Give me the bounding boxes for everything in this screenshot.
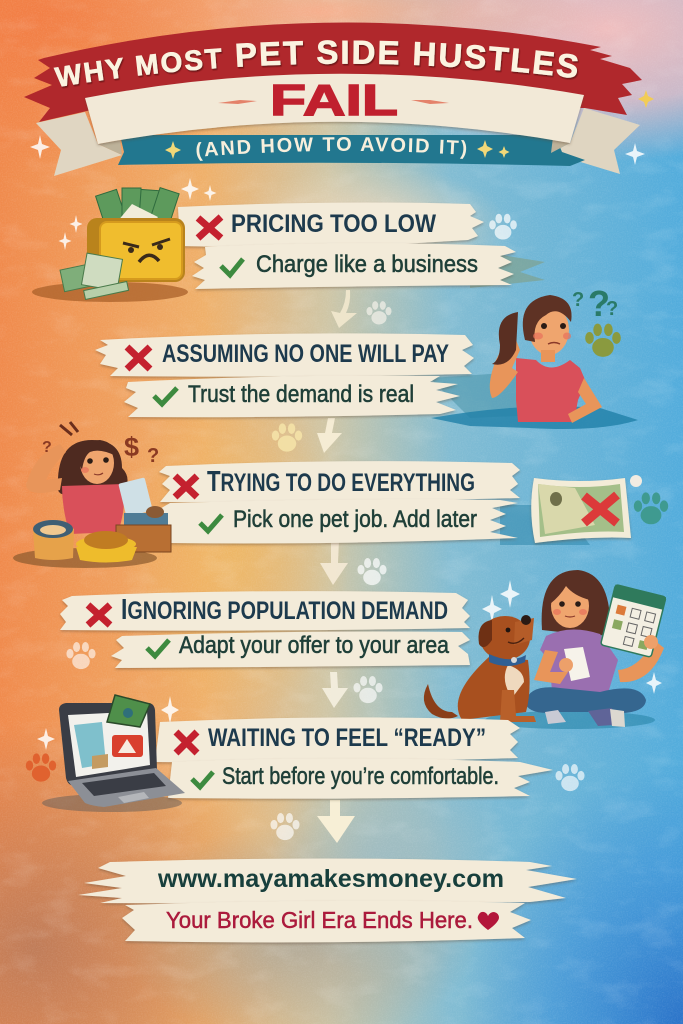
heading: TRYING TO DO EVERYTHING (207, 466, 475, 498)
mistake panel (155, 717, 520, 762)
arrow 2 (317, 418, 342, 453)
icon: heart (478, 912, 499, 930)
check icon (154, 388, 177, 404)
footer call to action (78, 858, 577, 942)
check icon (221, 259, 243, 275)
row 1: pricing too low (178, 203, 545, 289)
cross icon (176, 732, 197, 753)
mistake panel (178, 203, 484, 247)
dollar and question symbols: ? (147, 445, 159, 467)
icon: map with red cross (531, 475, 642, 543)
cross icon (127, 347, 150, 369)
check icon (200, 515, 222, 531)
row 5: waiting to feel ready (155, 717, 553, 799)
dollar and question symbols (42, 432, 159, 467)
row 4: ignoring population demand (60, 591, 470, 668)
red brush stroke (24, 22, 642, 122)
sparkles (30, 135, 662, 750)
advice: Charge like a business (256, 251, 478, 278)
arrow 4 (322, 672, 348, 708)
cross icon (175, 476, 197, 497)
heading: WAITING TO FEEL “READY” (208, 724, 486, 752)
check icon (192, 772, 213, 787)
smear (430, 372, 540, 418)
mistake panel (95, 333, 474, 377)
right ribbon tail (551, 108, 640, 174)
cross icon (88, 605, 110, 625)
illustration: woman with dog and calendar (424, 570, 666, 729)
fix panel (124, 376, 460, 417)
tagline: Your Broke Girl Era Ends Here. (166, 907, 473, 933)
fix panel (192, 243, 516, 289)
smear (500, 505, 590, 545)
cream ribbon (85, 74, 584, 144)
advice: Pick one pet job. Add later (233, 506, 477, 533)
illustration: confused woman (431, 283, 638, 429)
heading: PRICING TOO LOW (231, 210, 436, 238)
dog (424, 615, 536, 722)
arrow 1 (331, 290, 357, 328)
subtitle: (AND HOW TO AVOID IT) (196, 137, 466, 161)
teal brush stroke (118, 135, 585, 166)
website panel (78, 858, 577, 903)
heading: ASSUMING NO ONE WILL PAY (162, 340, 449, 368)
advice: Trust the demand is real (188, 381, 414, 408)
row 3: trying to do everything (155, 461, 590, 545)
illustration: overwhelmed woman with pet supplies (13, 422, 171, 568)
arrow 5 (317, 800, 355, 843)
question marks: ? (606, 298, 618, 320)
question marks: ? (588, 283, 610, 324)
dollar and question symbols: ? (42, 439, 52, 456)
question marks: ? (572, 289, 584, 311)
cross icon (198, 217, 221, 238)
fix panel (155, 499, 518, 543)
calendar (601, 585, 666, 657)
check icon (147, 640, 169, 656)
website: www.mayamakesmoney.com (157, 865, 504, 893)
advice: Start before you’re comfortable. (222, 763, 499, 790)
left ribbon tail (36, 112, 122, 176)
paw prints (26, 214, 668, 840)
dollar and question symbols: $ (124, 432, 139, 462)
icon: laptop with cash (42, 695, 185, 812)
mistake panel (159, 461, 520, 502)
tagline panel (122, 901, 531, 942)
mistake panel (60, 591, 470, 631)
FAIL heading: FAIL (270, 76, 398, 125)
smear (470, 250, 545, 288)
advice: Adapt your offer to your area (179, 632, 450, 659)
title line: WHY MOST PET SIDE HUSTLES (54, 40, 579, 88)
fix panel (168, 758, 553, 799)
arrow 3 (320, 540, 348, 585)
question marks (572, 283, 618, 324)
icon: angry wallet with cash (32, 188, 188, 302)
title banner (24, 22, 654, 176)
fix panel (111, 632, 470, 668)
heading: IGNORING POPULATION DEMAND (121, 594, 448, 626)
row 2: assuming no one will pay (95, 333, 540, 418)
